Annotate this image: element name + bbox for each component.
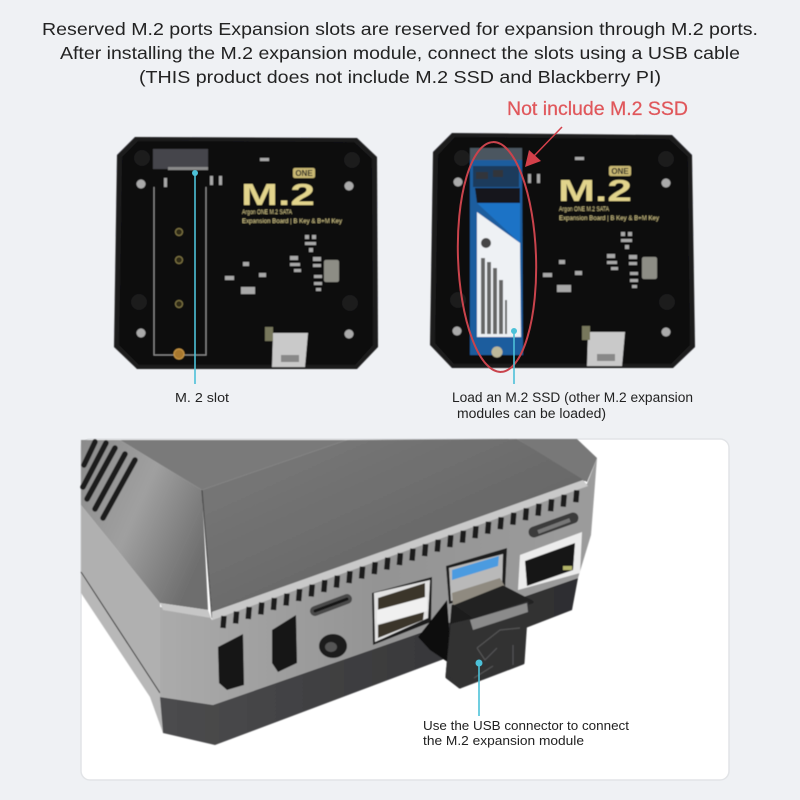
callout line: SSD (511, 328, 517, 384)
slot connector (153, 149, 208, 169)
front vents (223, 490, 577, 628)
HDMI ports (218, 634, 244, 690)
corner screws (454, 150, 470, 166)
label: USB connector: Use the USB connector to connect (423, 718, 629, 733)
M.2 logo: Expansion Board | B Key & B+M Key (559, 216, 659, 222)
double USB (372, 577, 432, 645)
M.2 logo: Argon ONE M.2 SATA (242, 210, 292, 216)
callout: not included ellipse (454, 141, 540, 373)
arrow: to SSD connector (525, 127, 562, 167)
USB port (587, 332, 625, 366)
heading: (THIS product does not include M.2 SSD and Blackberry PI) (139, 67, 661, 87)
case top face (120, 440, 347, 490)
button pill (534, 518, 573, 532)
M.2 logo (241, 168, 342, 225)
RJ45 (518, 532, 582, 590)
M.2 logo: ONE (295, 169, 313, 178)
light strip (212, 480, 588, 620)
illustration: case with USB connector (81, 439, 597, 745)
callout line: M.2 slot (192, 170, 198, 384)
label: load SSD (452, 390, 693, 421)
label: load SSD: modules can be loaded) (457, 406, 606, 421)
M.2 logo: M.2 (241, 177, 315, 212)
small components (164, 158, 322, 294)
USB-C port (315, 599, 347, 611)
mounting holes (176, 228, 182, 236)
heading (42, 19, 758, 87)
USB dongle (418, 578, 532, 687)
base (160, 578, 578, 745)
panel: M.2 slot board (114, 137, 378, 369)
panel: product photo card (81, 439, 729, 780)
power jack (319, 634, 347, 658)
M.2 logo: ONE (611, 167, 629, 176)
label: M.2 slot: M. 2 slot (175, 390, 229, 405)
small components (528, 157, 638, 292)
slot outline (154, 187, 206, 355)
M.2 logo (558, 166, 659, 222)
corner screws (134, 150, 150, 166)
heading: Reserved M.2 ports Expansion slots are reserved for expansion through M.2 ports. (42, 19, 758, 39)
USB3 stack (446, 548, 507, 604)
SSD (470, 148, 523, 358)
M.2 logo: Expansion Board | B Key & B+M Key (242, 219, 342, 225)
front face (160, 458, 597, 705)
label: USB connector (423, 718, 629, 748)
M.2 logo: M.2 (558, 173, 632, 208)
callout line: USB connector (476, 660, 482, 716)
case lower left side (81, 505, 160, 697)
red label: Not include M.2 SSD: Not include M.2 SSD (507, 98, 688, 120)
heading: After installing the M.2 expansion module, connect the slots using a USB cable (60, 43, 740, 63)
M.2 logo: Argon ONE M.2 SATA (559, 207, 609, 213)
panel: board with SSD (430, 133, 695, 368)
case chamfer with vents (81, 440, 208, 610)
USB port (272, 333, 308, 367)
label: load SSD: Load an M.2 SSD (other M.2 expansion (452, 390, 693, 405)
label: USB connector: the M.2 expansion module (423, 733, 584, 748)
